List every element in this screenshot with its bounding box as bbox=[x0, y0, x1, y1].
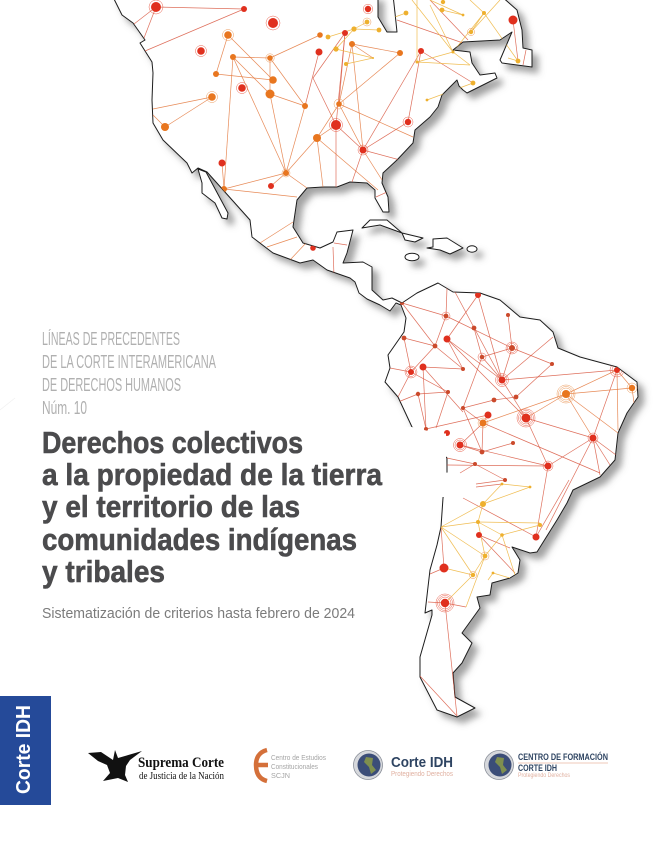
map: the Americas bbox=[112, 0, 638, 717]
North America network lines bbox=[134, 0, 526, 276]
icon: eagle bbox=[88, 750, 142, 782]
logo: Centro de Estudios Constitucionales: Constitucionales bbox=[271, 764, 318, 771]
logo: Suprema Corte: de Justicia de la Nación bbox=[139, 771, 224, 782]
main title bbox=[42, 425, 383, 589]
sidebar: Corte IDH bbox=[0, 696, 51, 805]
logo: Centro de Formación Corte IDH: CORTE IDH bbox=[518, 763, 557, 773]
North America nodes bbox=[149, 0, 520, 251]
logo: Suprema Corte bbox=[88, 750, 224, 782]
series heading: DE LA CORTE INTERAMERICANA bbox=[42, 352, 216, 372]
sidebar: Corte IDH: Corte IDH bbox=[13, 705, 35, 794]
series heading: LÍNEAS DE PRECEDENTES bbox=[42, 329, 180, 349]
logo: Centro de Estudios Constitucionales bbox=[256, 750, 326, 781]
South America network lines bbox=[390, 288, 635, 716]
logo: Centro de Formación Corte IDH: CENTRO DE FORMACIÓN bbox=[518, 751, 608, 762]
faint decorative trace bbox=[0, 398, 15, 410]
logo: Centro de Formación Corte IDH: Protegiendo Derechos bbox=[518, 773, 570, 779]
land silhouette bbox=[112, 0, 638, 717]
logo: Corte IDH: Corte IDH bbox=[391, 755, 453, 771]
network lines bbox=[134, 0, 637, 716]
main title: Derechos colectivos bbox=[42, 425, 303, 460]
logo: Corte IDH bbox=[354, 750, 453, 780]
main title: a la propiedad de la tierra bbox=[42, 457, 383, 492]
series heading: Núm. 10 bbox=[42, 398, 87, 418]
series heading bbox=[42, 329, 216, 418]
white text panel masking the map bbox=[0, 427, 452, 640]
main title: y tribales bbox=[42, 554, 165, 589]
icon: globe seal bbox=[354, 750, 382, 780]
series heading: DE DERECHOS HUMANOS bbox=[42, 375, 181, 395]
logo: Corte IDH: Protegiendo Derechos bbox=[391, 771, 453, 778]
logo: Centro de Estudios Constitucionales: SCJN bbox=[271, 773, 290, 780]
subtitle: Sistematización de criterios hasta febrero de 2024 bbox=[42, 605, 355, 622]
main title: y el territorio de las bbox=[42, 489, 300, 524]
main title: comunidades indígenas bbox=[42, 522, 357, 557]
logo: Suprema Corte: Suprema Corte bbox=[138, 755, 224, 771]
South America nodes bbox=[400, 292, 637, 612]
logo: Centro de Estudios Constitucionales: Centro de Estudios bbox=[271, 755, 326, 762]
logo: Centro de Formación Corte IDH bbox=[484, 750, 608, 780]
icon: globe seal bbox=[484, 750, 514, 780]
icon: orange E bbox=[256, 750, 268, 781]
